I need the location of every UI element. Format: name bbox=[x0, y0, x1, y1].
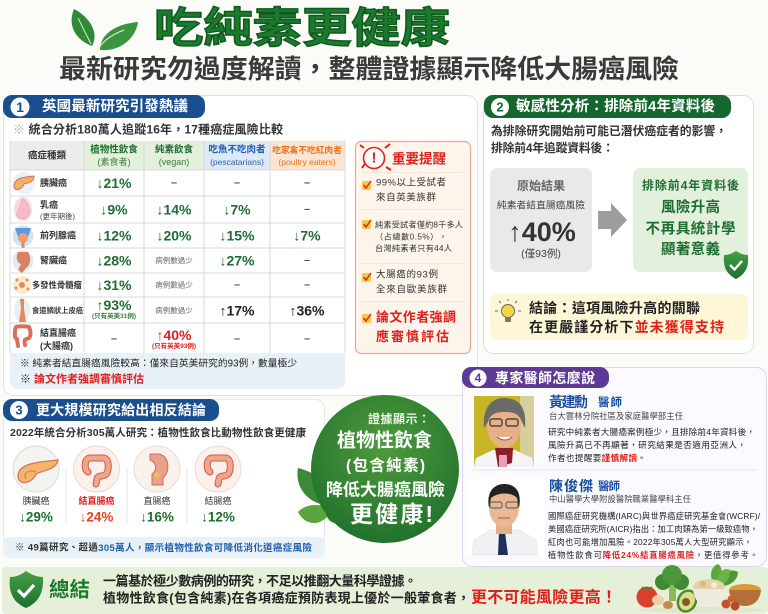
callout: table notes bbox=[10, 353, 345, 389]
card: after exclusion: 不再具統計學 bbox=[646, 220, 736, 238]
row: colorectal: (大腸癌) bbox=[40, 340, 73, 351]
row: breast: ↓7% bbox=[223, 202, 251, 218]
row: colorectal: ↑40% bbox=[156, 327, 192, 343]
card: original result: (僅93例) bbox=[521, 247, 561, 260]
item: reminder 4: 論文作者強調 bbox=[376, 310, 456, 324]
item: reminder 2: （占總數0.5%）， bbox=[375, 232, 447, 242]
item: pancreas bbox=[13, 446, 59, 524]
icon: leaves bbox=[297, 468, 342, 523]
subtitle: 最新研究勿過度解讀，整體證據顯示降低大腸癌風險 bbox=[59, 54, 679, 84]
text: Dr. Chen bbox=[548, 478, 761, 560]
callout: panel 3 note: ※ 49篇研究、超過305萬人，顯示植物性飲食可降低消化道癌症風險 bbox=[15, 542, 312, 554]
row: kidney bbox=[12, 250, 310, 273]
row: breast: – bbox=[304, 204, 310, 216]
row: pancreatic: – bbox=[171, 177, 177, 189]
row: colorectal: – bbox=[111, 333, 117, 345]
icon: warning: ! bbox=[372, 150, 376, 166]
panel: summary bbox=[2, 564, 768, 614]
heading: panel 2: 2 bbox=[496, 100, 504, 114]
text: Dr. Chen: 美國癌症研究所(AICR)指出：加工肉類為第一級致癌物， bbox=[548, 524, 758, 534]
heading: panel 3: 3 bbox=[15, 402, 23, 418]
item: reminder 3: 全來自歐美族群 bbox=[376, 284, 447, 296]
callout: evidence circle: 降低大腸癌風險 bbox=[326, 480, 445, 500]
card: after exclusion: 排除前4年資料後 bbox=[642, 178, 739, 192]
text: Dr. Chen: 陳俊傑 bbox=[549, 478, 593, 494]
card: after exclusion bbox=[633, 168, 748, 272]
icon: shield check bbox=[724, 251, 748, 279]
item: reminder 4: 應審慎評估 bbox=[376, 329, 449, 344]
row: prostate: ↓20% bbox=[156, 228, 192, 244]
row: colorectal: (只有英美93例) bbox=[152, 341, 196, 350]
row: myeloma: 多發性骨髓瘤 bbox=[32, 280, 82, 290]
text: panel 2 intro: 為排除研究開始前可能已潛伏癌症者的影響， bbox=[491, 124, 727, 138]
row: esophageal: ↑17% bbox=[219, 302, 255, 318]
callout: conclusion bbox=[490, 294, 748, 340]
table: cancer risk comparison: 吃家禽不吃紅肉者 bbox=[272, 144, 342, 155]
table: cancer risk comparison: (poultry eaters) bbox=[278, 157, 336, 167]
row: colorectal bbox=[15, 326, 310, 351]
panel: UK study bbox=[3, 95, 478, 396]
icon: warning bbox=[360, 144, 391, 170]
panel: sensitivity analysis bbox=[484, 95, 754, 354]
text: Dr. Huang: 醫師 bbox=[598, 396, 622, 409]
text: Dr. Huang bbox=[548, 394, 755, 463]
callout: conclusion: 在更嚴謹分析下並未獲得支持 bbox=[529, 319, 724, 335]
item: pancreas: ↓29% bbox=[19, 510, 53, 524]
item: rectal bbox=[134, 446, 180, 524]
item: colon bbox=[195, 446, 241, 524]
row: myeloma bbox=[13, 276, 310, 294]
photo: Dr. Chen bbox=[467, 478, 545, 556]
heading: panel 2 bbox=[484, 95, 731, 118]
heading: panel 1: 英國最新研究引發熱議 bbox=[42, 97, 188, 115]
text: Dr. Chen: 中山醫學大學附設醫院職業醫學科主任 bbox=[549, 494, 691, 504]
heading: panel 2: 敏感性分析：排除前4年資料後 bbox=[516, 97, 716, 115]
item: reminder 4 bbox=[362, 310, 456, 344]
heading: panel 1 bbox=[3, 95, 205, 118]
text: panel 2 intro bbox=[491, 124, 727, 155]
item: reminder 3 bbox=[362, 268, 447, 296]
title: 吃純素更健康 bbox=[154, 4, 450, 52]
callout: evidence circle bbox=[297, 395, 459, 543]
row: pancreatic bbox=[13, 172, 310, 194]
photo: Dr. Huang bbox=[474, 396, 534, 467]
card: after exclusion: 風險升高 bbox=[661, 198, 720, 216]
row: myeloma: ↓31% bbox=[96, 277, 132, 293]
card: original result: 原始結果 bbox=[517, 178, 565, 193]
text: Dr. Huang: 台大雲林分院社區及家庭醫學部主任 bbox=[549, 411, 683, 421]
item: colon: 結腸癌 bbox=[204, 495, 232, 506]
text: Dr. Chen: 紅肉也可能增加風險。2022年305萬人大型研究顯示， bbox=[548, 537, 752, 547]
item: pancreas: 胰臟癌 bbox=[22, 495, 50, 506]
text: Dr. Chen: 醫師 bbox=[598, 480, 620, 493]
text: study summary: ※ 統合分析180萬人追蹤16年，17種癌症風險比較 bbox=[13, 122, 283, 136]
table: cancer risk comparison: (素食者) bbox=[98, 156, 130, 167]
row: breast: ↓14% bbox=[156, 202, 192, 218]
card: original result: 純素者結直腸癌風險 bbox=[497, 198, 585, 212]
row: breast: ↓9% bbox=[100, 202, 128, 218]
heading: panel 4: 專家醫師怎麼說 bbox=[495, 370, 595, 386]
row: colorectal: 結直腸癌 bbox=[40, 327, 76, 338]
row: pancreatic: – bbox=[234, 177, 240, 189]
row: kidney: ↓27% bbox=[219, 252, 255, 268]
item: reminder 2: 台灣純素者只有44人 bbox=[375, 243, 452, 253]
table: cancer risk comparison: 純素飲食 bbox=[155, 144, 193, 156]
row: pancreatic: – bbox=[304, 177, 310, 189]
table: cancer risk comparison bbox=[10, 141, 345, 353]
item: colorectal: ↓24% bbox=[80, 510, 113, 524]
text: summary body: 更不可能風險更高！ bbox=[471, 588, 617, 606]
row: esophageal: 食道鱗狀上皮癌 bbox=[32, 306, 84, 315]
row: prostate: ↓15% bbox=[219, 228, 255, 244]
callout: evidence circle: 更健康! bbox=[350, 501, 433, 527]
callout: evidence circle: (包含純素) bbox=[346, 456, 425, 474]
callout: evidence circle: 證據顯示： bbox=[368, 411, 430, 426]
row: breast: 乳癌 bbox=[40, 199, 58, 210]
item: reminder 1: 99%以上受試者 bbox=[376, 176, 446, 188]
heading: panel 3 bbox=[3, 399, 219, 421]
text: Dr. Huang: 黃建勳 bbox=[549, 394, 588, 410]
card: after exclusion: 顯著意義 bbox=[661, 240, 720, 258]
text: 2022 study: 2022年統合分析305萬人研究：植物性飲食比動物性飲食更健康 bbox=[10, 426, 306, 439]
callout: table notes: ※ 論文作者強調審慎評估 bbox=[20, 372, 144, 386]
icon: summary shield bbox=[10, 571, 43, 608]
item: colorectal: 結直腸癌 bbox=[78, 495, 115, 506]
callout: conclusion: 結論：這項風險升高的關聯 bbox=[529, 300, 700, 316]
heading: panel 4 bbox=[462, 367, 609, 388]
card: original result: ↑40% bbox=[508, 217, 576, 247]
text: Dr. Chen: 國際癌症研究機構(IARC)與世界癌症研究基金會(WCRF)/ bbox=[548, 511, 761, 521]
item: colon: ↓12% bbox=[201, 510, 235, 524]
row: kidney: – bbox=[304, 254, 310, 266]
row: breast: (更年期後) bbox=[40, 211, 75, 221]
row: prostate: ↓12% bbox=[96, 228, 132, 244]
panel: expert doctors bbox=[462, 367, 766, 566]
item: rectal: 直腸癌 bbox=[143, 495, 171, 506]
row: prostate bbox=[12, 226, 321, 248]
table: cancer risk comparison: (pescatarians) bbox=[210, 157, 264, 167]
table: cancer risk comparison: 癌症種類 bbox=[28, 150, 66, 162]
row: esophageal: ↑93% bbox=[96, 297, 132, 313]
row: myeloma: – bbox=[234, 279, 240, 291]
row: esophageal: 病例數過少 bbox=[155, 305, 193, 315]
icon: title leaves bbox=[72, 9, 138, 53]
row: pancreatic: 胰臟癌 bbox=[40, 177, 67, 188]
row: kidney: 腎臟癌 bbox=[40, 254, 67, 266]
heading: panel 4: 4 bbox=[475, 371, 482, 385]
text: Dr. Chen: 植物性飲食可降低24%結直腸癌風險，更值得參考。 bbox=[548, 550, 758, 560]
item: reminder 2: 純素受試者僅約8千多人 bbox=[375, 220, 463, 230]
icon: vegetables and food bbox=[636, 564, 764, 614]
text: summary body bbox=[103, 574, 617, 606]
row: breast bbox=[14, 197, 310, 221]
text: summary body: 植物性飲食(包含純素)在各項癌症預防表現上優於一般葷食者， bbox=[103, 590, 470, 606]
heading: panel 3: 更大規模研究給出相反結論 bbox=[36, 402, 206, 418]
heading: panel 1: 1 bbox=[16, 99, 24, 115]
text: panel 2 intro: 排除前4年追蹤資料後： bbox=[491, 141, 614, 155]
item: colorectal bbox=[74, 446, 120, 524]
row: myeloma: – bbox=[304, 279, 310, 291]
callout: table notes: ※ 純素者結直腸癌風險較高：僅來自英美研究的93例，數量極少 bbox=[20, 356, 297, 370]
callout: evidence circle: 植物性飲食 bbox=[337, 428, 432, 452]
panel: larger study bbox=[3, 399, 325, 558]
arrow: result change bbox=[598, 203, 627, 237]
table: cancer risk comparison: (vegan) bbox=[159, 157, 189, 167]
item: rectal: ↓16% bbox=[140, 510, 174, 524]
text: Dr. Huang: 研究中純素者大腸癌案例極少，且排除前4年資料後， bbox=[548, 426, 755, 437]
row: prostate: 前列腺癌 bbox=[40, 230, 76, 240]
row: colorectal: – bbox=[234, 333, 240, 345]
row: esophageal bbox=[14, 297, 325, 322]
heading: summary: 總結 bbox=[49, 578, 90, 602]
row: pancreatic: ↓21% bbox=[96, 175, 132, 191]
table: cancer risk comparison: 吃魚不吃肉者 bbox=[208, 144, 266, 156]
row: colorectal: – bbox=[304, 333, 310, 345]
row: prostate: ↓7% bbox=[293, 228, 321, 244]
panel: important reminder bbox=[356, 142, 470, 354]
card: original result bbox=[490, 168, 592, 272]
heading: reminder: 重要提醒 bbox=[392, 152, 446, 166]
callout: panel 3 note bbox=[3, 537, 325, 558]
item: reminder 3: 大腸癌的93例 bbox=[376, 268, 438, 280]
icon: light bulb bbox=[495, 299, 521, 322]
item: reminder 1: 來自英美族群 bbox=[376, 192, 436, 204]
item: reminder 2 bbox=[362, 220, 463, 253]
row: kidney: 病例數過少 bbox=[155, 255, 193, 265]
text: Dr. Huang: 風險升高已不再顯著，研究結果是否適用亞洲人， bbox=[548, 439, 746, 450]
row: kidney: ↓28% bbox=[96, 252, 132, 268]
item: reminder 1 bbox=[362, 176, 446, 204]
row: myeloma: 病例數過少 bbox=[155, 280, 193, 290]
row: esophageal: ↑36% bbox=[289, 302, 325, 318]
table: cancer risk comparison: 植物性飲食 bbox=[90, 144, 138, 156]
text: Dr. Huang: 作者也提醒要謹慎解讀。 bbox=[548, 452, 646, 463]
text: summary body: 一篇基於極少數病例的研究，不足以推翻大量科學證據。 bbox=[103, 574, 417, 588]
row: esophageal: (只有英美31例) bbox=[92, 311, 136, 320]
